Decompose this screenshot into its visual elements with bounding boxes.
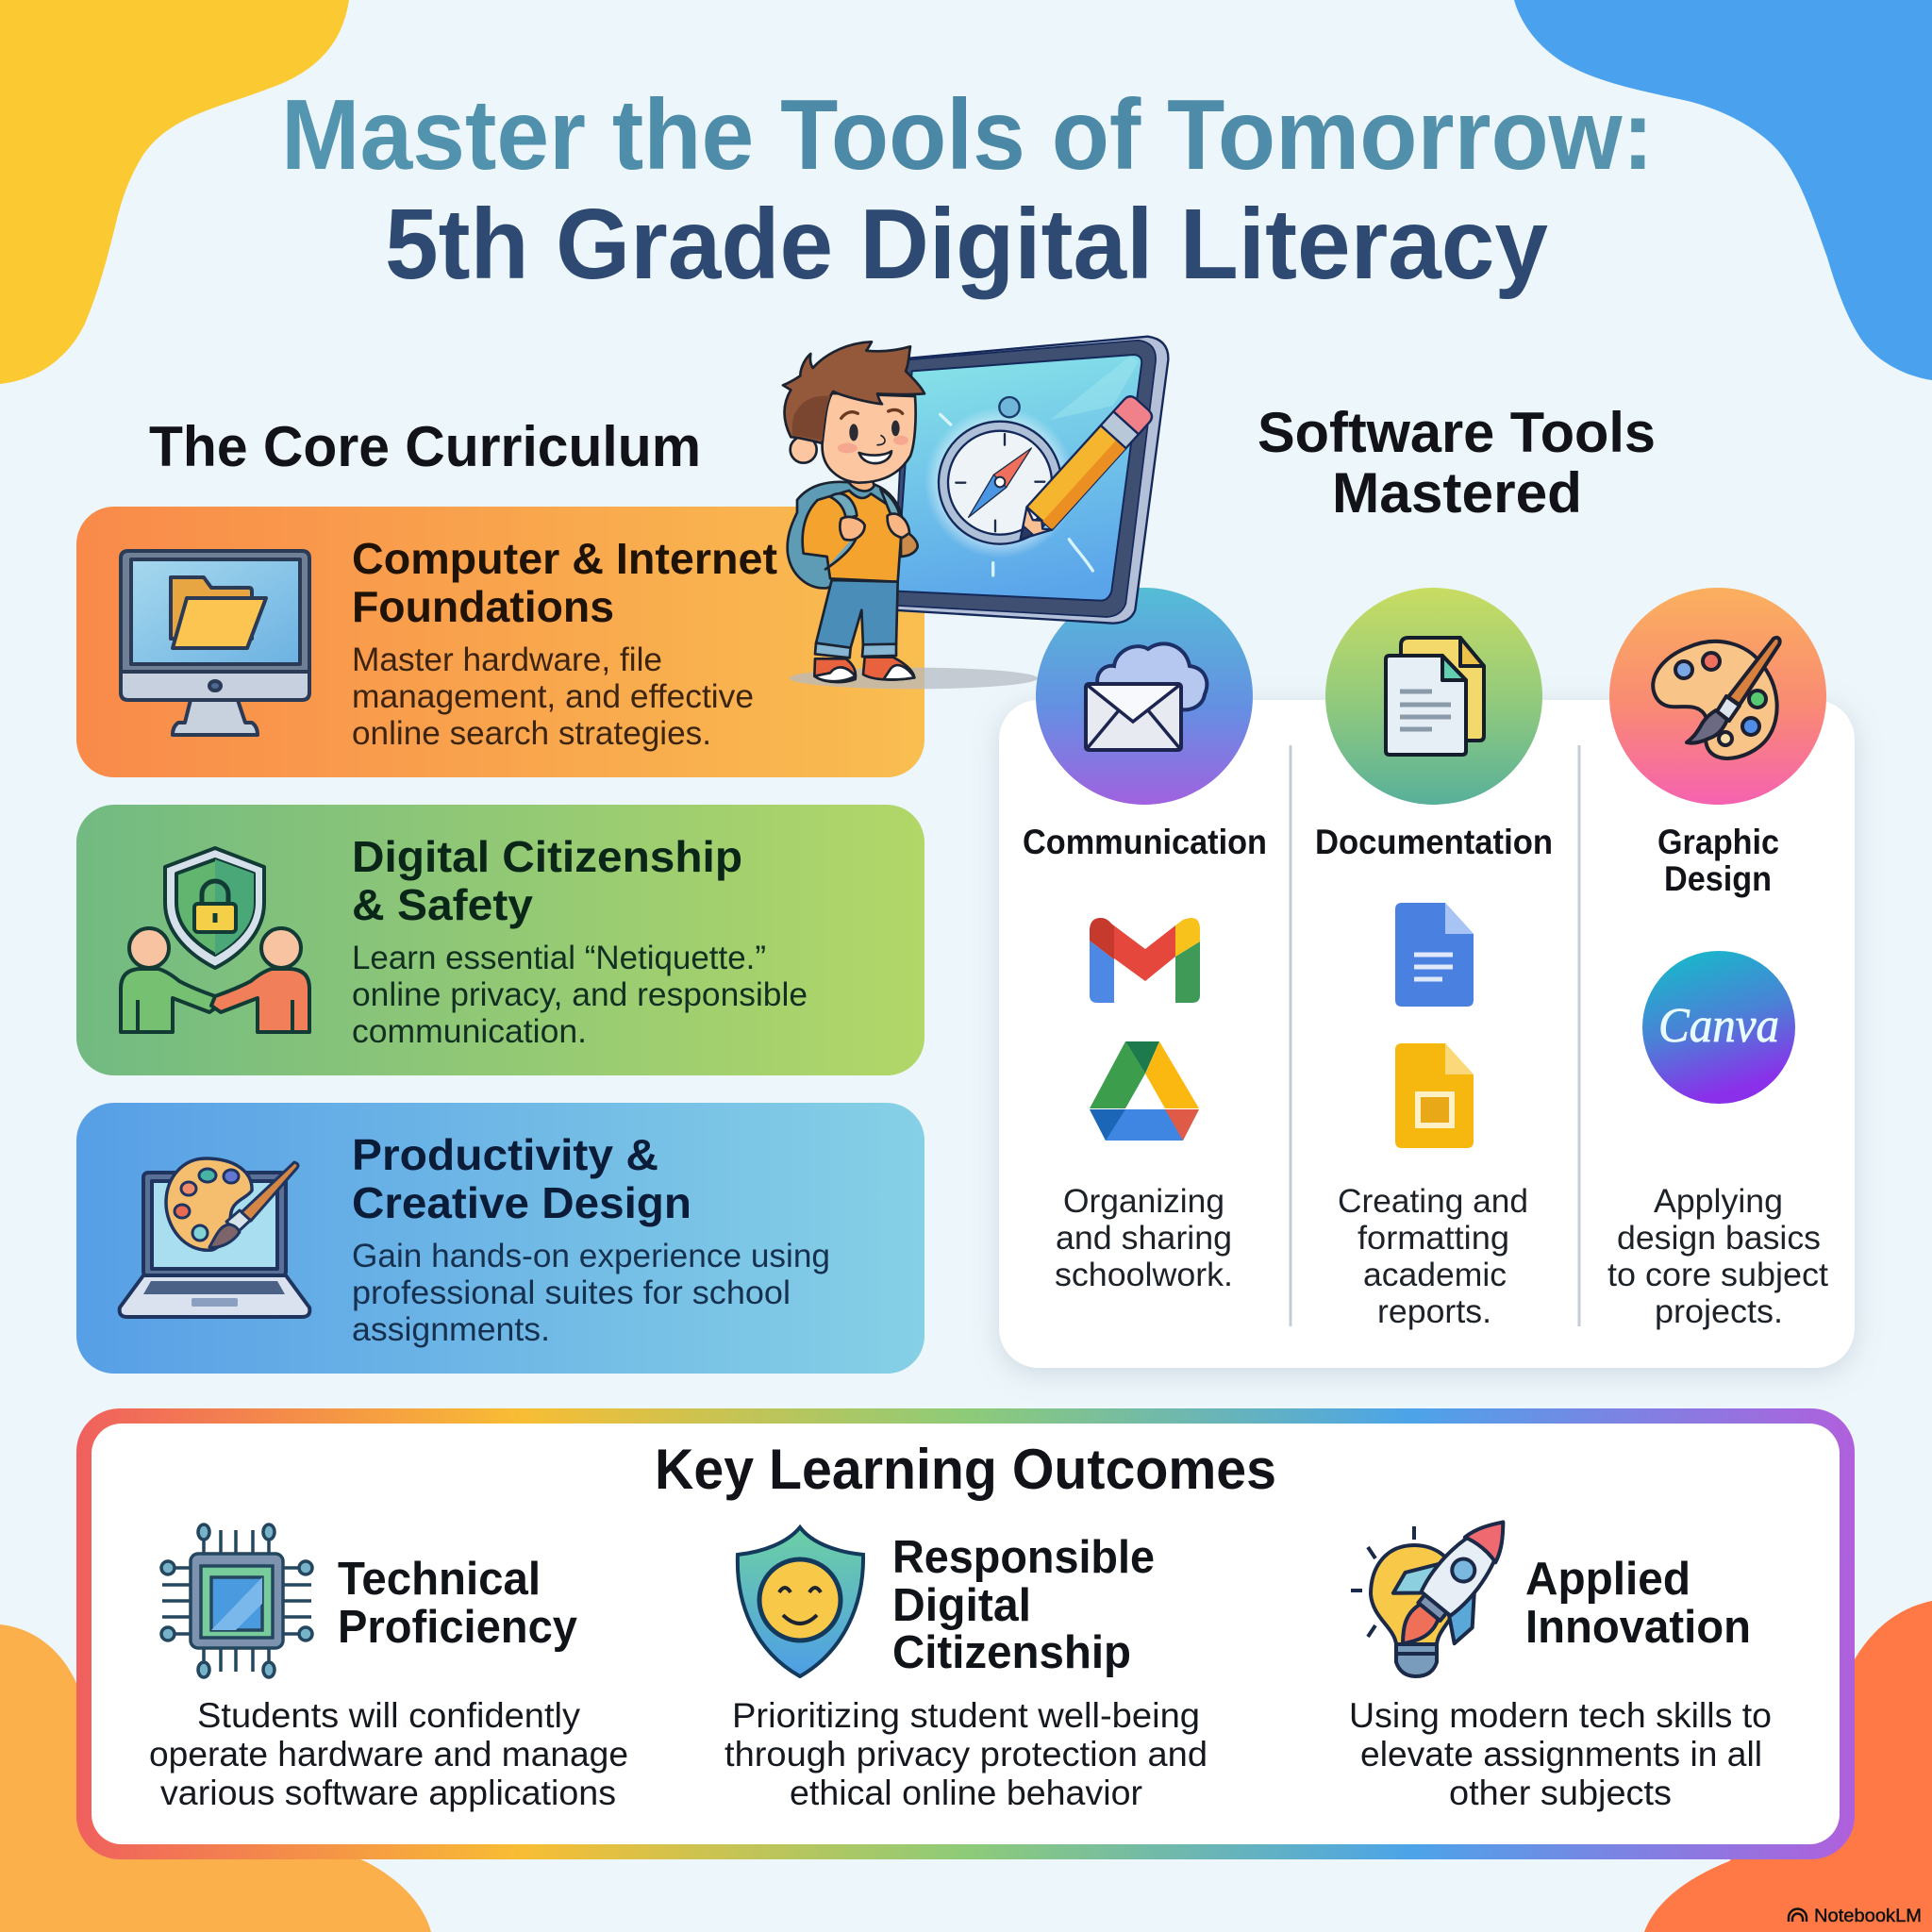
logo: Drive <box>1090 1041 1199 1141</box>
column: communication <box>1023 588 1267 1293</box>
text: description: Applying <box>1654 1183 1783 1220</box>
label: Responsible <box>892 1532 1155 1583</box>
label: Documentation: Documentation <box>1315 823 1553 861</box>
text: card body <box>352 641 754 752</box>
icon: smiley shield <box>738 1527 863 1676</box>
description: ethical online behavior <box>790 1774 1142 1812</box>
label <box>892 1532 1155 1678</box>
text: card body: communication. <box>352 1013 587 1050</box>
title: 5th Grade Digital Literacy <box>385 189 1548 300</box>
text: description <box>1607 1183 1828 1330</box>
label: Graphic Design: Graphic <box>1657 823 1779 861</box>
panel: computer and internet foundations <box>76 507 924 777</box>
label: Graphic Design: Design <box>1664 859 1772 898</box>
text: card title: Digital Citizenship <box>352 832 742 881</box>
text: description: academic <box>1363 1257 1507 1293</box>
text: card body: online search strategies. <box>352 715 711 752</box>
text: description: schoolwork. <box>1055 1257 1233 1293</box>
icon: palette circle <box>1609 588 1826 805</box>
text: description: to core subject <box>1607 1257 1828 1293</box>
text: card title: Creative Design <box>352 1178 691 1227</box>
blob: yellow top-left <box>0 0 349 384</box>
label <box>1525 1554 1751 1653</box>
description: elevate assignments in all <box>1360 1735 1762 1774</box>
description: through privacy protection and <box>724 1735 1208 1774</box>
icon: documents circle <box>1325 588 1542 805</box>
description: Prioritizing student well-being <box>732 1696 1200 1735</box>
description <box>1349 1696 1772 1812</box>
description: Students will confidently <box>197 1696 581 1735</box>
description <box>724 1696 1208 1812</box>
blob: red-orange bottom-right <box>1644 1601 1932 1932</box>
boy <box>783 341 924 682</box>
pencil <box>1008 393 1155 551</box>
title <box>281 79 1654 300</box>
text: card title: Productivity & <box>352 1130 658 1179</box>
logo: Canva <box>1642 951 1795 1104</box>
text: description: reports. <box>1377 1293 1491 1330</box>
label: Graphic Design <box>1657 823 1779 898</box>
blob: orange bottom-left <box>0 1624 431 1932</box>
text: card body: Master hardware, file <box>352 641 662 678</box>
text: card body: Gain hands-on experience using <box>352 1238 830 1274</box>
label: Technical <box>338 1554 541 1605</box>
compass <box>924 397 1092 575</box>
text: card body: assignments. <box>352 1311 550 1348</box>
description <box>149 1696 628 1812</box>
text: card title <box>352 1130 691 1227</box>
illustration: boy with tablet, compass and pencil <box>783 337 1168 689</box>
text: description: Organizing <box>1063 1183 1224 1220</box>
logo: Canva: Canva <box>1658 999 1779 1053</box>
description: operate hardware and manage <box>149 1735 628 1774</box>
text: card body: Learn essential “Netiquette.” <box>352 940 766 976</box>
text: card body <box>352 940 808 1050</box>
icon: envelope and cloud circle <box>1036 588 1253 805</box>
title: Master the Tools of Tomorrow: <box>281 79 1654 191</box>
panel: key learning outcomes <box>76 1408 1855 1859</box>
heading: Software Tools Mastered <box>1257 401 1656 525</box>
panel: productivity and creative design <box>76 1103 924 1374</box>
logo: Docs <box>1395 903 1474 1007</box>
heading: Software Tools Mastered: Software Tools <box>1257 401 1656 464</box>
text: description: formatting <box>1357 1220 1509 1257</box>
heading: Software Tools Mastered: Mastered <box>1332 461 1582 525</box>
text: description: design basics <box>1617 1220 1821 1257</box>
outcome: technical proficiency <box>149 1524 628 1812</box>
icon: laptop with palette <box>120 1158 309 1317</box>
logo: Gmail <box>1090 918 1200 1003</box>
text: description: projects. <box>1655 1293 1783 1330</box>
label: Proficiency <box>338 1602 577 1653</box>
text: card title: Foundations <box>352 582 614 631</box>
label: Citizenship <box>892 1627 1131 1678</box>
text: description <box>1338 1183 1528 1330</box>
tablet <box>893 337 1168 624</box>
outcome: responsible digital citizenship <box>724 1527 1208 1812</box>
text: card body: online privacy, and responsible <box>352 976 808 1013</box>
text: description: Creating and <box>1338 1183 1528 1220</box>
text: card body <box>352 1238 830 1348</box>
text: card body: management, and effective <box>352 678 754 715</box>
description: various software applications <box>160 1774 616 1812</box>
text: description: and sharing <box>1056 1220 1232 1257</box>
column: documentation <box>1315 588 1553 1330</box>
icon: circuit chip <box>161 1524 312 1677</box>
icon: lightbulb and rocket <box>1351 1494 1537 1676</box>
heading: The Core Curriculum: The Core Curriculum <box>149 415 701 478</box>
label: Innovation <box>1525 1602 1751 1653</box>
text: card title <box>352 832 742 929</box>
text: card title: & Safety <box>352 880 533 929</box>
icon: shield, lock and handshake <box>121 848 309 1032</box>
text: card title: Computer & Internet <box>352 534 777 583</box>
watermark: NotebookLM: NotebookLM <box>1814 1907 1922 1926</box>
text: card body: professional suites for school <box>352 1274 791 1311</box>
label: Communication: Communication <box>1023 823 1267 861</box>
column: graphic design <box>1607 588 1828 1330</box>
shadow <box>790 668 1038 689</box>
label <box>338 1554 577 1653</box>
panel: digital citizenship and safety <box>76 805 924 1075</box>
label: Applied <box>1525 1554 1690 1605</box>
label: Digital <box>892 1580 1031 1631</box>
text: description <box>1055 1183 1233 1293</box>
icon: desktop monitor with folder <box>121 551 309 735</box>
heading: Key Learning Outcomes: Key Learning Outcomes <box>655 1438 1276 1501</box>
panel: software tools <box>999 588 1855 1368</box>
text: card title <box>352 534 777 631</box>
blob: blue top-right <box>1514 0 1932 380</box>
description: Using modern tech skills to <box>1349 1696 1772 1735</box>
outcome: applied innovation <box>1349 1494 1772 1812</box>
description: other subjects <box>1449 1774 1672 1812</box>
logo: Slides <box>1395 1043 1474 1148</box>
